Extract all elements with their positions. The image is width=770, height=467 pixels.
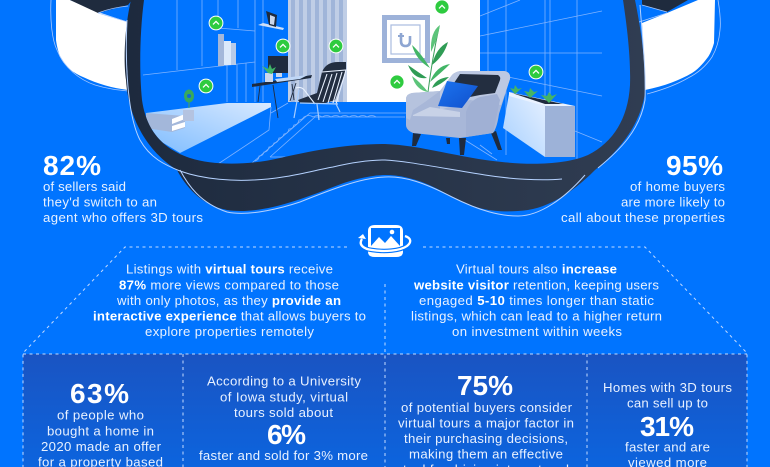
floor rug outlines (252, 113, 497, 163)
stat: 95% of home buyers (561, 150, 725, 225)
stat: 31% faster: Homes with 3D tours (603, 380, 732, 395)
icon: 360 degree photo (358, 225, 410, 257)
books (218, 34, 236, 66)
stat: 75% of potential buyers: of potential buyers consider (401, 400, 573, 415)
text block: virtual tours views: explore properties remotely (145, 324, 314, 339)
wall frame with logo (384, 18, 428, 60)
green hotspot markers (199, 0, 543, 93)
stat: 63% made an offer: 63% (70, 378, 129, 409)
stat: 6% faster: faster and sold for 3% more (199, 448, 368, 463)
room interior seen through headset (143, 0, 602, 164)
stat: 6% faster: 6% (267, 419, 306, 450)
wall shelf with picture (258, 11, 284, 30)
planter with plants (503, 85, 575, 157)
stat: 82% of sellers: 82% (43, 150, 101, 181)
stat: 63% made an offer: bought a home in (47, 423, 154, 438)
white wall (347, 0, 480, 102)
wireframe right wall grid (480, 0, 602, 160)
stat: 75% of potential buyers: virtual tours a major factor in (398, 416, 574, 431)
curtains (288, 0, 347, 102)
text block: virtual tours views: with only photos, as they provide an (116, 293, 341, 308)
stat: 6% faster: According to a University (207, 374, 361, 389)
stat: 31% faster: can sell up to (627, 396, 708, 411)
text block: virtual tours views: Listings with virtual tours receive (126, 262, 333, 277)
sideboard (146, 90, 271, 153)
desk with monitor (252, 56, 312, 118)
stat: 6% faster (199, 374, 368, 463)
stat: 82% of sellers (43, 150, 203, 225)
headset right ear piece (636, 0, 720, 94)
headset dark band (125, 0, 645, 211)
armchair pillow (438, 81, 478, 108)
stat: 82% of sellers: they'd switch to an (43, 194, 157, 210)
text block: visitor retention: engaged 5-10 times longer than static (419, 293, 654, 308)
text block: virtual tours views: 87% more views compared to those (119, 277, 339, 292)
desk chair (294, 62, 346, 120)
stat: 63% made an offer: 2020 made an offer (41, 439, 162, 454)
stat: 75% of potential buyers: making them an effective (409, 447, 563, 462)
text block: virtual tours views: interactive experience that allows buyers to (93, 309, 366, 324)
stat: 31% faster: faster and are (625, 440, 710, 455)
headset left ear piece (51, 0, 132, 91)
headset highlight lines (126, 5, 645, 216)
stat: 75% of potential buyers: 75% (457, 370, 513, 401)
text block: visitor retention: on investment within weeks (452, 324, 622, 339)
text block: visitor retention: Virtual tours also increase (456, 262, 617, 277)
stat: 82% of sellers: of sellers said (43, 179, 126, 194)
stat: 95% of home buyers: 95% (666, 150, 723, 181)
dashed frame outline (23, 247, 747, 467)
stat: 6% faster: of Iowa study, virtual (220, 389, 348, 404)
stat: 95% of home buyers: are more likely to (621, 194, 725, 210)
VR headset illustration (51, 0, 720, 216)
lower dark-blue panel (23, 354, 747, 467)
text block: visitor retention (411, 262, 662, 339)
potted plant behind armchair (408, 25, 450, 92)
stat: 82% of sellers: agent who offers 3D tours (43, 210, 203, 225)
stat: 95% of home buyers: call about these properties (561, 210, 725, 225)
stat: 31% faster: 31% (640, 411, 694, 442)
text block: visitor retention: listings, which can lead to a higher return (411, 309, 662, 324)
wireframe bookshelf (143, 0, 288, 164)
stat: 95% of home buyers: of home buyers (630, 179, 725, 194)
stat: 75% of potential buyers (398, 370, 574, 467)
stat: 75% of potential buyers: their purchasing decisions, (404, 431, 568, 446)
text block: virtual tours views (93, 262, 366, 339)
stat: 31% faster (603, 380, 732, 467)
text block: visitor retention: website visitor retention, keeping users (413, 277, 659, 292)
stat: 63% made an offer: of people who (57, 408, 144, 423)
stat: 6% faster: tours sold about (234, 405, 333, 420)
stat: 63% made an offer (38, 378, 163, 467)
armchair (406, 71, 510, 155)
